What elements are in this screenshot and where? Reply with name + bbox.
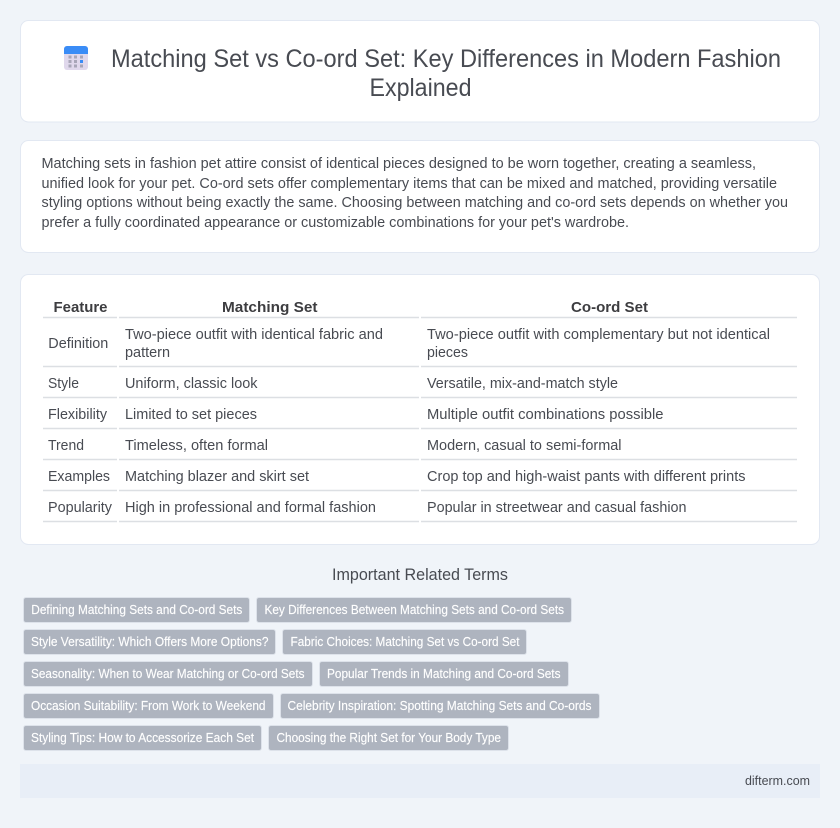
tag: Seasonality: When to Wear Matching or Co-ord Sets xyxy=(31,666,305,681)
row: definition: Two-piece outfit with identical fabric and xyxy=(125,327,383,343)
row: definition: Two-piece outfit with complementary but not identical xyxy=(427,327,770,343)
table header row: Matching Set xyxy=(222,299,318,316)
row: style: Versatile, mix-and-match style xyxy=(427,376,618,392)
tag: Celebrity Inspiration: Spotting Matching Sets and Co-ords xyxy=(288,698,592,713)
row: definition: pattern xyxy=(125,345,170,361)
row: flexibility: Flexibility xyxy=(48,407,108,423)
tag xyxy=(24,662,312,686)
row: flexibility: Limited to set pieces xyxy=(125,407,257,423)
table header row: Co-ord Set xyxy=(571,299,648,316)
tag: Styling Tips: How to Accessorize Each Set xyxy=(31,730,254,745)
row: style xyxy=(48,376,618,392)
row: flexibility: Multiple outfit combinations possible xyxy=(427,407,664,423)
tag: Choosing the Right Set for Your Body Type xyxy=(276,730,501,745)
row: popularity xyxy=(48,500,686,516)
row: trend: Trend xyxy=(48,438,84,454)
tag xyxy=(24,726,262,750)
tag: Popular Trends in Matching and Co-ord Sets xyxy=(327,666,561,681)
icon: calendar xyxy=(64,46,88,70)
row: trend: Modern, casual to semi-formal xyxy=(427,438,622,454)
row: definition: pieces xyxy=(427,345,468,361)
panel: intro text: styling options without being exactly the same. Choosing between matching and co-ord sets depends on whether you xyxy=(42,195,788,211)
row: trend xyxy=(48,438,622,454)
row: flexibility xyxy=(48,407,664,423)
panel: header xyxy=(20,20,820,122)
panel: intro text: unified look for your pet. Co-ord sets offer complementary items that can be mixed and matched, providing versatile xyxy=(42,176,777,192)
tag xyxy=(24,598,250,622)
tag xyxy=(24,630,276,654)
panel: intro text xyxy=(20,140,820,252)
row: trend: Timeless, often formal xyxy=(125,438,268,454)
tag xyxy=(268,726,508,750)
row: definition: Definition xyxy=(48,336,108,352)
table header row xyxy=(54,299,648,316)
title: Matching Set vs Co-ord Set: Key Differences in Modern Fashion xyxy=(111,45,781,73)
tag xyxy=(256,598,572,622)
heading: related terms: Important Related Terms xyxy=(332,566,508,584)
tag: Fabric Choices: Matching Set vs Co-ord Set xyxy=(290,634,520,649)
footer xyxy=(20,764,820,798)
row: definition xyxy=(48,327,770,361)
row: examples xyxy=(48,469,746,485)
row: style: Style xyxy=(48,376,79,392)
row: examples: Examples xyxy=(48,469,110,485)
row: popularity: Popular in streetwear and casual fashion xyxy=(427,500,686,516)
tag: Key Differences Between Matching Sets and Co-ord Sets xyxy=(264,602,564,617)
footer: difterm.com xyxy=(745,773,810,788)
tag: Defining Matching Sets and Co-ord Sets xyxy=(31,602,243,617)
tag: Style Versatility: Which Offers More Options? xyxy=(31,634,268,649)
row: style: Uniform, classic look xyxy=(125,376,258,392)
tag xyxy=(24,694,274,718)
row: examples: Crop top and high-waist pants with different prints xyxy=(427,469,746,485)
row: popularity: Popularity xyxy=(48,500,113,516)
row: popularity: High in professional and formal fashion xyxy=(125,500,376,516)
row: examples: Matching blazer and skirt set xyxy=(125,469,309,485)
related term tags xyxy=(24,598,600,750)
tag xyxy=(280,694,600,718)
tag xyxy=(320,662,568,686)
panel: comparison table xyxy=(20,274,820,544)
panel: intro text: prefer a fully coordinated appearance or customizable combinations for your pet's wardrobe. xyxy=(42,215,629,231)
tag: Occasion Suitability: From Work to Weekend xyxy=(31,698,266,713)
tag xyxy=(282,630,526,654)
panel: intro text: Matching sets in fashion pet attire consist of identical pieces designed to be worn together, creating a seamless, xyxy=(42,156,756,172)
title xyxy=(111,45,781,102)
title: Explained xyxy=(370,74,472,102)
table header row: Feature xyxy=(54,299,108,316)
